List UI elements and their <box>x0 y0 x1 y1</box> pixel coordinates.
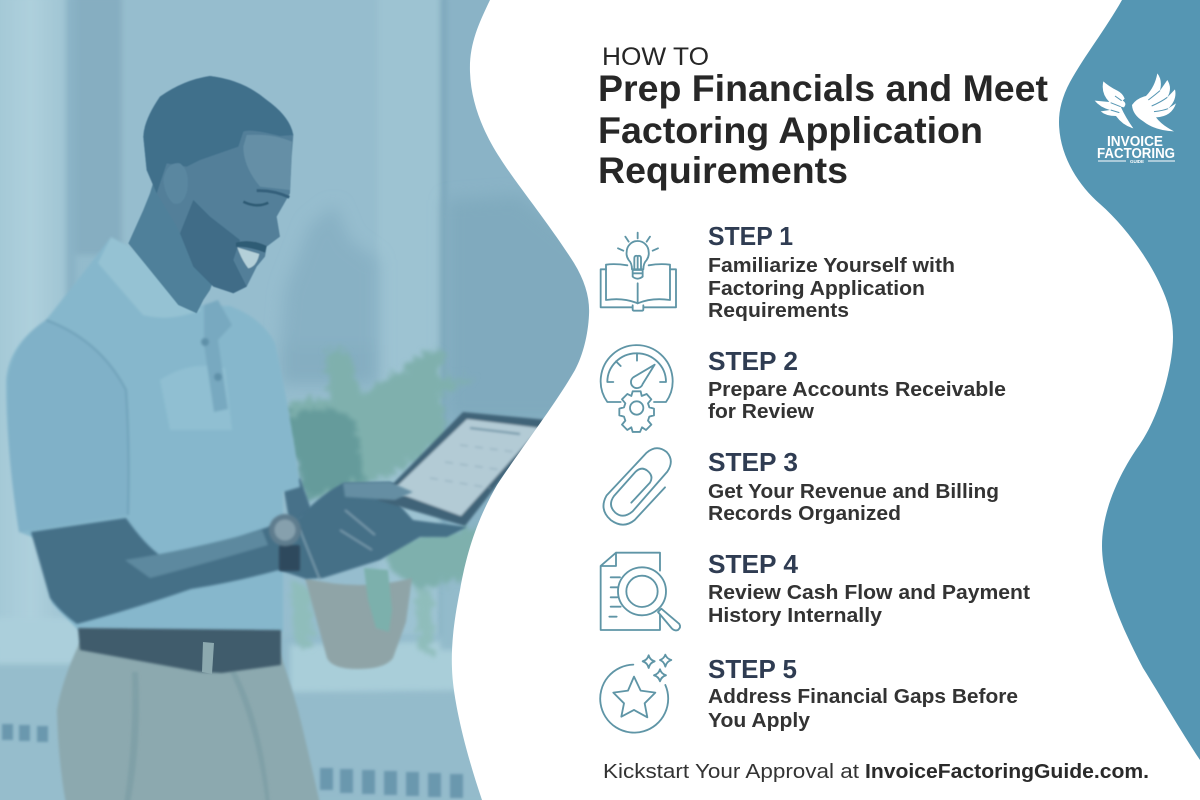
step 3 text <box>708 447 999 525</box>
step 4 text: History Internally <box>708 605 883 627</box>
tablet <box>377 412 548 526</box>
title <box>598 68 1048 191</box>
distant skyline through window <box>280 195 600 420</box>
title: Factoring Application <box>598 110 983 151</box>
step 3 text: Get Your Revenue and Billing <box>708 481 999 503</box>
step 3 text: Records Organized <box>708 503 901 525</box>
logo: Invoice Factoring Guide: GUIDE <box>1130 159 1144 164</box>
window sill and wall <box>0 560 500 800</box>
call to action footer: InvoiceFactoringGuide.com. <box>865 761 1149 783</box>
step 5 text: You Apply <box>708 710 811 732</box>
step 4 text <box>708 549 1030 627</box>
heading: how to: HOW TO <box>602 43 709 71</box>
man: polo shirt <box>6 237 300 632</box>
radiator vents <box>2 724 463 798</box>
man: far arm behind tablet hand <box>283 478 312 525</box>
step 4 text: Review Cash Flow and Payment <box>708 582 1030 604</box>
step 2 text: STEP 2 <box>708 346 798 376</box>
step 1 text: Factoring Application <box>708 278 925 300</box>
icon: star in circle with sparkles <box>600 655 671 733</box>
step 2 text: Prepare Accounts Receivable <box>708 379 1006 401</box>
step 1 text: STEP 1 <box>708 221 793 251</box>
title: Requirements <box>598 150 848 191</box>
step 3 text: STEP 3 <box>708 447 798 477</box>
icon: eagle wings <box>1095 73 1176 131</box>
step 5 text <box>708 654 1018 732</box>
logo: Invoice Factoring Guide: FACTORING <box>1097 146 1175 162</box>
man: belt <box>78 628 281 673</box>
icon: gauge and gear <box>601 345 673 432</box>
step 2 text: for Review <box>708 401 814 423</box>
photo: man with tablet at a window <box>0 0 620 800</box>
step 5 text: Address Financial Gaps Before <box>708 686 1018 708</box>
step 1 text: Familiarize Yourself with <box>708 255 955 277</box>
plant <box>285 350 490 655</box>
man: thumb over tablet <box>343 482 413 500</box>
shirt collar <box>98 237 201 318</box>
step 1 text: Requirements <box>708 300 849 322</box>
step 5 text: STEP 5 <box>708 654 797 684</box>
step 4 text: STEP 4 <box>708 549 799 579</box>
man: forearm and lower hand <box>31 482 467 624</box>
blue wavy right panel <box>1059 0 1200 760</box>
title: Prep Financials and Meet <box>598 68 1048 109</box>
icon: lightbulb and open book <box>601 233 676 311</box>
call to action footer <box>603 761 1149 783</box>
logo: Invoice Factoring Guide <box>1095 73 1176 164</box>
flower pot <box>305 578 412 669</box>
step 2 text <box>708 346 1006 423</box>
logo wordmark: INVOICE <box>1107 134 1163 150</box>
man: trousers <box>57 642 320 800</box>
call to action footer: Kickstart Your Approval at <box>603 761 859 783</box>
white wavy content panel <box>452 0 1200 800</box>
icon: paperclip <box>603 448 671 525</box>
man: head and face <box>128 76 293 313</box>
icon: document with magnifier <box>601 553 680 630</box>
man: wristwatch <box>269 514 301 571</box>
step 1 text <box>708 221 955 322</box>
